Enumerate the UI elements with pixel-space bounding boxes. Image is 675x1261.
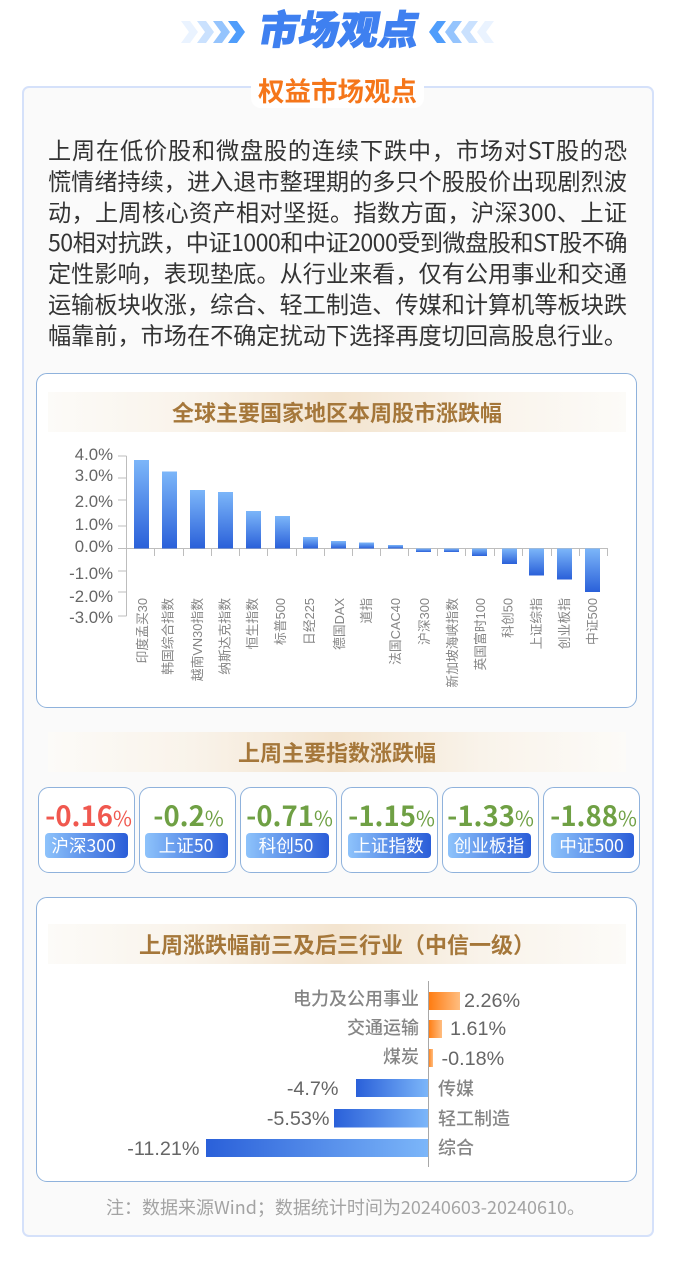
text block: market commentary: 50相对抗跌，中证1000和中证2000受到微盘股和ST股不确 <box>48 224 627 258</box>
value labels: -11.21% <box>127 1138 200 1160</box>
card: 上证50 <box>139 787 236 873</box>
value labels: 1.61% <box>450 1018 506 1040</box>
x axis labels: 道指 <box>359 598 374 624</box>
panel: global indices chart <box>36 373 637 708</box>
card: 科创50: -0.71% <box>246 794 333 834</box>
x axis labels: 韩国综合指数 <box>160 598 176 675</box>
card: 上证指数: -1.15% <box>348 794 435 834</box>
card: 科创50: 科创50 <box>259 833 313 858</box>
text block: market commentary: 慌情绪持续，进入退市整理期的多只个股股价出现剧烈波 <box>48 163 627 197</box>
title text: 市场观点 <box>255 0 425 56</box>
bar chart: global stock market weekly change <box>69 445 608 688</box>
heading: top and bottom industries: 上周涨跌幅前三及后三行业（中信一级） <box>139 928 535 960</box>
x axis labels: 纳斯达克指数 <box>218 598 232 675</box>
card: 上证50: 上证50 <box>159 833 213 858</box>
x axis labels: 印度孟买30 <box>135 598 150 663</box>
x axis labels: 中证500 <box>585 598 600 645</box>
heading: global indices: 全球主要国家地区本周股市涨跌幅 <box>172 396 502 428</box>
industry labels: 综合 <box>438 1134 474 1160</box>
x axis labels: 日经225 <box>302 598 317 645</box>
x axis labels: 法国CAC40 <box>388 598 403 665</box>
card: 创业板指: 创业板指 <box>454 833 524 858</box>
bar chart: top and bottom three industries <box>127 981 520 1167</box>
x axis labels: 标普500 <box>273 598 288 645</box>
industry labels: 交通运输 <box>347 1014 419 1040</box>
text block: market commentary <box>48 132 627 351</box>
industry labels: 电力及公用事业 <box>293 985 419 1011</box>
card: 创业板指 <box>442 787 539 873</box>
y axis labels: -2.0% <box>69 587 113 606</box>
y axis labels: 4.0% <box>75 445 113 464</box>
card: 沪深300 <box>38 787 135 873</box>
bars <box>134 460 600 592</box>
y axis labels: -3.0% <box>69 608 113 627</box>
x axis labels: 英国富时100 <box>473 598 488 671</box>
text block: market commentary: 定性影响，表现垫底。从行业来看，仅有公用事业和交通 <box>48 255 627 289</box>
x axis labels <box>135 598 600 688</box>
text block: market commentary: 动，上周核心资产相对坚挺。指数方面，沪深300、上证 <box>48 194 627 228</box>
y axis labels <box>69 445 113 627</box>
text block: market commentary: 幅靠前，市场在不确定扰动下选择再度切回高股息行业。 <box>48 317 627 351</box>
x axis labels: 越南VN30指数 <box>190 598 205 681</box>
x axis labels: 恒生指数 <box>245 598 260 649</box>
x axis labels: 科创50 <box>500 598 516 638</box>
x axis labels: 上证综指 <box>529 598 544 649</box>
x axis labels: 创业板指 <box>557 598 572 649</box>
text block: market commentary: 上周在低价股和微盘股的连续下跌中，市场对ST股的恐 <box>48 132 627 166</box>
icon: right chevrons <box>429 21 494 43</box>
value labels: 2.26% <box>464 990 520 1012</box>
card: 中证500: -1.88% <box>550 794 637 834</box>
industry labels: 煤炭 <box>383 1043 419 1069</box>
axis <box>428 981 430 1167</box>
positive bars <box>428 992 460 1067</box>
value labels: -4.7% <box>287 1078 338 1100</box>
subtitle: 权益市场观点 <box>258 70 417 109</box>
industry labels: 轻工制造 <box>438 1105 510 1131</box>
value labels: -5.53% <box>267 1108 330 1130</box>
industry labels <box>293 985 510 1160</box>
x axis labels: 德国DAX <box>332 598 347 650</box>
card: 中证500: 中证500 <box>559 833 624 858</box>
x axis labels: 新加坡海峡指数 <box>445 598 460 688</box>
text block: market commentary: 运输板块收涨，综合、轻工制造、传媒和计算机等板块跌 <box>48 286 627 320</box>
heading: major indices: 上周主要指数涨跌幅 <box>238 736 436 768</box>
axes <box>118 456 608 616</box>
y axis labels: -1.0% <box>69 564 113 583</box>
y axis labels: 3.0% <box>75 466 113 485</box>
negative bars <box>206 1079 428 1157</box>
y axis labels: 2.0% <box>75 492 113 511</box>
icon: left chevrons <box>181 21 245 43</box>
card: 中证500 <box>543 787 640 873</box>
card: 上证指数: 上证指数 <box>353 833 424 858</box>
card: 上证50: -0.2% <box>153 794 224 834</box>
industry labels: 传媒 <box>438 1075 474 1101</box>
footnote: 注：数据来源Wind；数据统计时间为20240603-20240610。 <box>106 1194 585 1220</box>
panel: industry chart <box>36 897 637 1182</box>
card: 沪深300: 沪深300 <box>51 833 116 858</box>
heading: global indices <box>48 392 626 432</box>
y axis labels: 1.0% <box>75 515 113 534</box>
card: 科创50 <box>240 787 337 873</box>
card: 创业板指: -1.33% <box>447 794 534 834</box>
value labels: -0.18% <box>442 1048 504 1070</box>
heading: major indices <box>48 732 626 772</box>
heading: top and bottom industries <box>48 924 626 964</box>
title <box>181 0 494 56</box>
y axis labels: 0.0% <box>75 537 113 556</box>
x axis labels: 沪深300 <box>417 598 432 645</box>
card: 上证指数 <box>341 787 438 873</box>
value labels <box>127 990 520 1160</box>
card: 沪深300: -0.16% <box>45 794 132 834</box>
